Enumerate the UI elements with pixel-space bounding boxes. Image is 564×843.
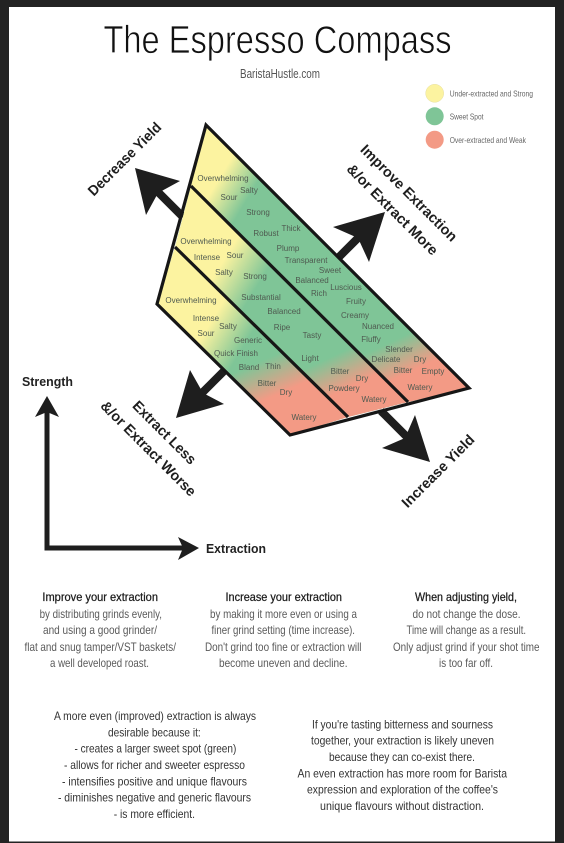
band: top: Watery (407, 383, 433, 392)
band: middle: Light (301, 354, 319, 363)
band: top: Empty (422, 367, 444, 376)
band: top: Slender (385, 345, 413, 354)
text block: bitterness and sourness: An even extraction has more room for Barista (298, 766, 507, 780)
legend item: under-extracted: Under-extracted and Strong (450, 88, 533, 98)
band: top: Sweet (319, 266, 342, 275)
text block: why even extraction: - creates a larger sweet spot (green) (74, 742, 236, 756)
text block: increase your extraction: by making it more even or using a (210, 607, 357, 621)
subtitle: BaristaHustle.com (240, 67, 320, 81)
axis: extraction arrow (44, 537, 199, 560)
text block: increase your extraction: finer grind setting (time increase). (212, 623, 355, 637)
text block: improve your extraction: and using a good grinder/ (43, 623, 158, 637)
axis label: extraction: Extraction (206, 541, 266, 556)
band: middle (175, 186, 408, 417)
legend item: over-extracted: Over-extracted and Weak (450, 135, 527, 145)
band: top: Nuanced (362, 322, 394, 331)
band: top: Salty (240, 186, 258, 195)
text block: when adjusting yield (393, 590, 540, 670)
band: top: Sour (221, 193, 238, 202)
text block: why even extraction: - intensifies positive and unique flavours (62, 774, 247, 788)
arrow: decrease yield (135, 168, 183, 217)
band: middle: Salty (215, 268, 233, 277)
legend (426, 84, 533, 149)
band: bottom: Generic (234, 336, 262, 345)
text block: when adjusting yield: When adjusting yield, (415, 590, 517, 604)
band: bottom: Sour (198, 329, 215, 338)
text block: why even extraction: - diminishes negative and generic flavours (58, 791, 251, 805)
text block: when adjusting yield: Time will change as a result. (406, 623, 526, 637)
band: bottom: Intense (193, 314, 220, 323)
band: middle: Dry (356, 374, 368, 383)
arrow: increase yield (381, 411, 430, 462)
band: middle: Substantial (241, 293, 281, 302)
band: bottom: Dry (280, 388, 292, 397)
text block: increase your extraction: Increase your extraction (226, 590, 342, 604)
band: middle: Strong (243, 272, 267, 281)
axis: strength arrow (35, 396, 59, 550)
band: top: Dry (414, 355, 426, 364)
band: bottom (157, 247, 348, 435)
band: middle: Intense (194, 253, 221, 262)
band: middle: Tasty (303, 331, 321, 340)
label: decrease yield: Decrease Yield (85, 120, 165, 200)
text block: why even extraction: - is more efficient. (114, 807, 195, 821)
text block: bitterness and sourness: because they can co-exist there. (329, 750, 475, 764)
text block: why even extraction (54, 709, 256, 821)
text block: when adjusting yield: do not change the dose. (412, 607, 520, 621)
label: extract less: &/or Extract Worse (97, 398, 199, 500)
band: middle: Powdery (328, 384, 360, 393)
text block: why even extraction: desirable because it: (108, 725, 201, 739)
band: bottom: Overwhelming (165, 296, 217, 305)
text block: bitterness and sourness (298, 717, 507, 813)
band: middle: Sour (227, 251, 244, 260)
text block: why even extraction: A more even (improved) extraction is always (54, 709, 256, 723)
band: top: Bitter (394, 366, 413, 375)
band: top (191, 125, 469, 402)
band: top: Balanced (295, 276, 329, 285)
text block: increase your extraction: Don't grind too fine or extraction will (205, 640, 362, 654)
text block: improve your extraction: Improve your extraction (42, 590, 158, 604)
text block: bitterness and sourness: together, your extraction is likely uneven (311, 734, 494, 748)
text block: increase your extraction (205, 590, 362, 670)
band: top: Overwhelming (197, 174, 249, 183)
compass outline (157, 125, 469, 435)
label: improve extraction: &/or Extract More (343, 161, 441, 259)
band: bottom: Bitter (258, 379, 277, 388)
band: top: Fluffy (361, 335, 381, 344)
text block: improve your extraction: by distributing grinds evenly, (40, 607, 162, 621)
band: top: Rich (311, 289, 327, 298)
axis arrows (35, 396, 199, 560)
text block: why even extraction: - allows for richer and sweeter espresso (64, 758, 245, 772)
text block: improve your extraction: flat and snug tamper/VST baskets/ (24, 640, 177, 654)
text block: when adjusting yield: is too far off. (439, 656, 493, 670)
band: top: Plump (277, 244, 300, 253)
text block: bitterness and sourness: If you're tasting bitterness and sourness (312, 717, 493, 731)
band: bottom: Bland (239, 363, 259, 372)
band: top: Strong (246, 208, 270, 217)
band: top: Fruity (346, 297, 366, 306)
compass chart (157, 125, 469, 435)
band: middle: Ripe (274, 323, 291, 332)
band: middle: Bitter (331, 367, 350, 376)
text block: increase your extraction: become uneven and decline. (219, 656, 348, 670)
text block: improve your extraction: a well developed roast. (50, 656, 149, 670)
band: middle: Overwhelming (180, 237, 232, 246)
label: improve extraction: Improve Extraction (357, 142, 460, 245)
arrow: extract less (176, 370, 224, 418)
band: top: Thick (281, 224, 302, 233)
label: extract less: Extract Less (129, 398, 199, 468)
text block: improve your extraction (24, 590, 177, 670)
text block: bitterness and sourness: unique flavours without distraction. (320, 799, 484, 813)
band: top: Robust (253, 229, 279, 238)
band: top: Delicate (372, 355, 401, 364)
label: increase yield: Increase Yield (399, 432, 478, 511)
band: bottom: Salty (219, 322, 237, 331)
band: bottom: Thin (265, 362, 281, 371)
text block: bitterness and sourness: expression and exploration of the coffee's (307, 783, 498, 797)
band: middle: Balanced (267, 307, 301, 316)
band: top: Creamy (341, 311, 369, 320)
legend item: sweet spot: Sweet Spot (450, 112, 484, 122)
band: middle: Watery (361, 395, 387, 404)
title: The Espresso Compass (104, 19, 452, 62)
band: top: Luscious (330, 283, 362, 292)
band: top: Transparent (285, 256, 328, 265)
arrow: improve extraction (333, 212, 385, 262)
axis label: strength: Strength (22, 374, 73, 389)
band: bottom: Quick Finish (214, 349, 258, 358)
band: bottom: Watery (291, 413, 317, 422)
